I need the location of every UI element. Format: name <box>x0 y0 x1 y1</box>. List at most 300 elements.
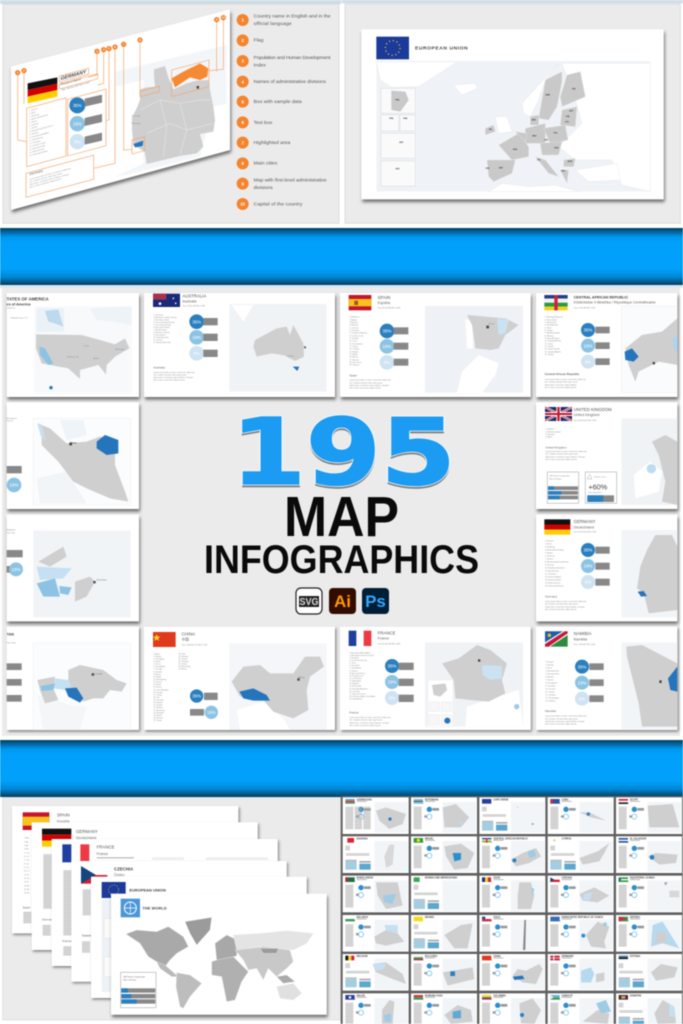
Germany map <box>132 63 215 164</box>
card: Namibia: 1. Erongo <box>545 662 553 664</box>
card: Australia: 2. Australian Capital Territory <box>153 316 177 319</box>
card: Namibia: 35% <box>578 664 586 669</box>
slide: Spain: Spain <box>23 905 31 909</box>
card: Denmark <box>7 515 139 621</box>
orange callout boxes and leaders: 1 <box>17 71 19 75</box>
icon: United Nations emblem <box>121 899 140 917</box>
card: China: 1. Anhui <box>153 652 161 655</box>
flag: Spain <box>349 295 371 310</box>
card: Germany: felis et amet consectetur adipiscing elit. <box>545 608 577 611</box>
slide: Spain: 1. And <box>24 837 29 840</box>
card: Spain: 17. Navarra <box>349 359 360 361</box>
card: France: elit. Curabitur interdum diam eget mauris <box>349 719 382 722</box>
card: Central African Republic: ullamcorper, at faucibus neque dapibus. <box>545 383 577 386</box>
row 6: ESWATINI <box>630 994 641 997</box>
card: Iran: Pop. 81 <box>7 421 13 423</box>
card: China: 3. Chongqing <box>153 658 164 660</box>
panel: lower-right slides <box>340 515 677 730</box>
map of Europe: ITA <box>537 159 541 162</box>
card: Germany: Lorem ipsum dolor sit amet, consectetur adipiscing <box>545 600 586 603</box>
map of Europe: PRT <box>396 169 400 171</box>
card: France: 18. Provence-Alpes-Côte d'Azur <box>349 695 376 698</box>
card: Germany: Deutschland <box>574 525 594 529</box>
card: Namibia: Namibia <box>545 709 556 713</box>
card: Central African Republic: 13. Ouham-Pendé <box>545 349 560 351</box>
card: United Kingdom: United Kingdom <box>574 413 600 417</box>
numbered legend: Index <box>254 62 266 68</box>
card: China: 30. Yunnan <box>178 658 188 660</box>
row 6: DJIBOUTI <box>562 995 573 997</box>
card: Central African Republic <box>536 293 677 397</box>
card: Kazakhstan: TAN <box>7 632 14 636</box>
country name: Pop. 83,019,200 HDI: 0.947 <box>61 81 91 92</box>
card: Central African Republic: 9. Nana-Mambéré <box>545 338 559 340</box>
card: Australia: 7. Norfolk Island <box>153 329 167 331</box>
slide: Spain: España <box>57 820 70 824</box>
orange callout boxes and leaders: 9 <box>216 18 218 22</box>
card: Denmark: København <box>97 580 107 582</box>
card: Namibia: elit. Curabitur interdum diam eget mauris <box>545 717 578 720</box>
card: France: 3. Bretagne <box>349 656 359 659</box>
card: Namibia: 13. Otjozondjupa <box>545 697 560 700</box>
card: China: 29. Xinjiang <box>178 656 188 658</box>
icon: SVG <box>296 588 322 614</box>
card: France: 8. Guyane <box>349 670 358 672</box>
list of administrative divisions: 7. Hessen <box>29 126 38 130</box>
flag: China <box>153 632 176 647</box>
slide: Germany: GERMANY <box>76 829 98 834</box>
card: Central African Republic: Ködörösêse tî Bêafrîka / République Centrafricaine <box>574 301 656 305</box>
card: United Kingdom: 2. Northern Ireland <box>545 430 561 433</box>
card: United States: Washington <box>115 348 125 351</box>
slanted Germany slide <box>11 9 230 210</box>
row 5 <box>343 954 682 991</box>
card: France: felis et amet consectetur adipiscing elit. <box>349 724 382 727</box>
orange callout boxes and leaders: 3 <box>96 49 98 53</box>
card: China: 8. Guizhou <box>153 671 162 673</box>
row 4: CHILE <box>493 917 501 919</box>
row 2: BRAZIL <box>425 837 434 840</box>
card: Spain: 13. La Rioja <box>349 349 360 351</box>
card: Central African Republic: 7. Mambéré-Kadéï <box>545 333 560 335</box>
row 6: BURKINA FASO <box>425 994 443 997</box>
map of Europe: DEU <box>532 136 537 138</box>
card: Australia: elit. Curabitur interdum diam eget mauris <box>153 373 186 376</box>
panel: top-left slides <box>7 293 335 509</box>
row 3: CHAD <box>493 877 500 880</box>
card: China: 13. Hubei <box>153 684 162 686</box>
card: Germany: 13. Sachsen-Anhalt <box>545 576 561 579</box>
slide: Spain <box>12 806 238 933</box>
country name <box>61 69 91 92</box>
numbered legend: Population and Human Development <box>254 55 331 61</box>
slide: Spain: 12. Ga <box>24 878 30 880</box>
world map <box>126 917 313 1008</box>
country name: GERMANY <box>61 69 87 82</box>
numbered legend: 6 <box>241 120 244 125</box>
list of administrative divisions: 5. Bayern <box>29 120 37 124</box>
slide: Czechia <box>71 861 287 982</box>
slide: Czechia: CZECHIA <box>114 866 134 871</box>
card: Spain: 3. Asturias <box>349 321 358 324</box>
card: Spain: ullamcorper, at faucibus neque dapibus. Quisque <box>349 384 389 387</box>
card: China: 9. Hainan <box>153 674 161 676</box>
row 4: BRUNEI <box>425 917 434 919</box>
row 3: BOSNIA AND HERZEGOVINA <box>425 877 458 880</box>
list of administrative divisions: 11. Brandenburg <box>29 137 43 142</box>
numbered legend: Main cities <box>254 161 278 167</box>
slide: Spain: 6. Cnt <box>24 855 29 858</box>
numbered legend: Highlighted area <box>254 140 291 146</box>
map of Europe: IRL <box>489 129 493 131</box>
row 5: DENMARK <box>562 955 574 958</box>
card: Central African Republic: felis et amet consectetur adipiscing elit. <box>545 386 577 389</box>
card: Namibia: 8. Ohangwena <box>545 683 558 685</box>
card: Australia: 9% <box>194 351 200 356</box>
card: France: 7. Guadeloupe <box>349 668 361 670</box>
row 5: CHINA <box>493 955 501 958</box>
slide: Spain: 7. Cas <box>24 860 29 862</box>
card: Spain: 7. Castilla-La Mancha <box>349 332 368 335</box>
card: Iran <box>7 402 139 509</box>
card: Germany: Pop. 83,019,200 HDI: 0.947 <box>574 532 596 534</box>
slide: Spain: SPAIN <box>57 813 70 818</box>
card: France: 15. Nouvelle-Aquitaine <box>349 687 368 690</box>
row 3: EQUATORIAL GUINEA <box>630 877 655 880</box>
map of Europe: LTU <box>565 122 569 124</box>
orange callout boxes and leaders <box>15 15 226 197</box>
card: France: 16. Occitanie <box>349 690 360 693</box>
box: GDP sector composition: GDP Sector Composition <box>123 976 145 979</box>
numbered legend: divisions <box>254 185 273 191</box>
card: Germany: 19% <box>584 564 592 569</box>
blue band one <box>0 228 683 285</box>
card: Spain: Spain <box>349 373 357 377</box>
card: Germany: 9. Sachsen <box>545 565 554 567</box>
row 5: BULGARIA <box>425 955 438 958</box>
card: France: France <box>349 710 359 714</box>
numbered legend: 8 <box>241 161 244 166</box>
card: China: 15. Inner Mongolia <box>153 689 169 691</box>
title: 195: 195 <box>231 399 456 506</box>
card: France: 6. Grand Est <box>349 664 360 667</box>
card: Australia: Australia <box>182 299 198 303</box>
card: Spain: SPAIN <box>378 295 390 300</box>
card: United States: es of America <box>7 303 31 307</box>
card: Germany: 5. Bayern <box>545 553 553 555</box>
card: Denmark: Midtjylland <box>7 529 15 532</box>
card: China: 21. Qinghai <box>153 705 163 707</box>
map of Europe <box>376 61 650 192</box>
card: Spain: 6. Cantabria <box>349 329 360 332</box>
flag: Central African Republic <box>544 295 568 310</box>
card: Central African Republic: Lorem ipsum dolor sit amet, consectetur adipiscing <box>545 378 586 381</box>
orange callout boxes and leaders: 6 <box>114 45 116 49</box>
slide: France <box>52 839 278 966</box>
box: +60% statistic: +60% <box>588 483 608 492</box>
card: Germany: 2. Berlin <box>545 544 552 546</box>
box: +60% statistic <box>585 472 617 503</box>
card: Central African Republic: 6. Lobaye <box>545 330 553 332</box>
card: Australia: 8. Northern Territory <box>153 331 170 334</box>
card: United States: Lincoln <box>83 346 89 348</box>
icon: Adobe Illustrator <box>329 588 356 614</box>
card: China: 14. Hunan <box>153 687 162 689</box>
map of Europe: POL <box>554 132 558 134</box>
card: Namibia: 10. Omusati <box>545 688 556 691</box>
row 2 <box>343 836 682 873</box>
card: United States: Capital etc <box>7 307 15 310</box>
row 3: BANGLADESH <box>357 877 373 880</box>
slide: Germany: Deutschland <box>76 836 96 840</box>
card: United Kingdom: 3. Scotland <box>545 433 554 436</box>
row 2: CENTRAL AFRICAN REPUBLIC <box>493 837 528 840</box>
card: China: 23. Shandong <box>153 710 165 712</box>
card: Germany: 4. Baden-Württemberg <box>545 549 563 552</box>
card: Germany: 14. Rheinland-Pfalz <box>545 580 561 582</box>
numbered legend: 4 <box>241 79 244 84</box>
blue band two <box>0 740 683 797</box>
card: China: 28. Tibet <box>178 652 186 655</box>
card: Spain: España <box>378 301 391 305</box>
list of administrative divisions: 12. Thüringen <box>29 140 41 145</box>
card: Kazakhstan <box>7 627 139 730</box>
card: France: 9. Hauts-de-France <box>349 672 365 675</box>
slide: Spain: 13. Ri <box>24 882 29 884</box>
orange callout boxes and leaders: 4 <box>103 48 105 52</box>
slide: The World <box>111 894 327 1015</box>
card: United Kingdom: 4. Wales <box>545 437 552 439</box>
card: China: 35% <box>192 694 201 699</box>
card: Australia: Pop. 25,203,198 HDI: 0.939 <box>182 305 205 307</box>
card: China: 19% <box>207 710 216 715</box>
sample data circles: 35% <box>73 103 82 108</box>
map of Europe: DNK <box>532 120 536 122</box>
row 4: BELARUS <box>357 916 368 919</box>
card: Germany: elit. Curabitur interdum diam eget mauris <box>545 603 578 606</box>
card: Australia: 10. South Australia <box>153 336 170 339</box>
map of Europe: HUN <box>554 148 559 150</box>
card: Australia: 19% <box>192 335 201 340</box>
country name: Deutschland <box>61 77 81 86</box>
card: France: 10. Île-de-France <box>349 674 363 677</box>
orange callout boxes and leaders: 2 <box>23 69 25 73</box>
map of Europe: GRC <box>561 170 566 172</box>
card: Kazakhstan: Pop. 18.3m <box>7 642 16 644</box>
row 4: DEMOCRATIC REPUBLIC OF CONGO <box>562 916 603 919</box>
card: China: 26. Sichuan <box>153 717 163 719</box>
flag: United Kingdom <box>545 407 572 421</box>
card: China: 7. Guangxi <box>153 669 163 671</box>
card: Iran: Mazandaran <box>7 418 17 420</box>
card: France <box>340 627 531 730</box>
card: Namibia: felis et amet consectetur adipiscing elit. <box>545 723 577 726</box>
text box: Lorem ipsum dolor sit amet, consectetur adipiscing <box>29 167 70 181</box>
slide: Spain: 10. Ce <box>24 871 29 873</box>
card: China: Pop. 1,439,323,776 HDI: 0.758 <box>182 644 207 646</box>
card: France: 11. La Réunion <box>349 678 362 680</box>
slide: Czechia: Czechia <box>82 934 94 938</box>
map of Europe: EST <box>569 110 574 112</box>
row 3: CZECHIA <box>562 877 572 880</box>
card: Germany: 11. Brandenburg <box>545 571 558 573</box>
numbered legend: 9 <box>241 181 244 186</box>
card: China: 4. Fujian <box>153 661 160 663</box>
card: Germany: 12. Thüringen <box>545 574 556 576</box>
panel: stacked slides <box>3 797 342 1020</box>
card: China: 6. Guangdong <box>153 666 165 668</box>
card: United Kingdom: ullamcorper, at faucibus neque dapibus. Quisque <box>545 455 585 458</box>
list of administrative divisions: 16. Schleswig-Holstein <box>29 149 48 157</box>
row 5: BELGIUM <box>357 956 367 958</box>
card: Spain: 5. Canarias <box>349 327 359 329</box>
card: United Kingdom: Pop. 66,435,550 HDI: 0.932 <box>574 420 596 422</box>
card: France: 35% <box>388 664 396 669</box>
card: Spain: Pop. 46,733,038 HDI: 0.893 <box>378 307 400 309</box>
card: China: 31. Zhejiang <box>178 661 188 663</box>
card: Germany: 6. Saarland <box>545 556 554 558</box>
slide: Spain: 9. Cat <box>24 866 29 869</box>
orange callout boxes and leaders: 7 <box>123 42 125 46</box>
card: France: 14. Normandie <box>349 686 361 688</box>
title: 195: 195 <box>231 399 456 506</box>
card: Germany: 10. Nordrhein-Westfalen <box>545 567 565 570</box>
card: Spain: 12. Galicia <box>349 346 359 348</box>
card: Spain: elit. Curabitur interdum diam eget mauris <box>349 381 382 384</box>
card: Namibia: 6. Khomas <box>545 677 554 679</box>
card: Denmark: Pop. 5.8m <box>7 532 15 534</box>
numbered legend: Country name in English and in the <box>254 14 331 20</box>
card: Germany: 35% <box>584 548 592 553</box>
card: United States: Atlanta <box>93 357 100 360</box>
map of Europe: BGR <box>568 161 573 163</box>
card: United Kingdom: 1. England <box>545 429 554 431</box>
map of Europe: FIN <box>572 88 576 90</box>
card: China: 24. Shanghai <box>153 712 165 714</box>
flag: Namibia <box>545 631 568 647</box>
card: Australia: 4. Cocos (Keeling) Islands <box>153 322 175 324</box>
row 4: ERITREA <box>630 916 641 919</box>
slide: France: France <box>97 852 108 856</box>
list of administrative divisions: 4. Baden-Württemberg <box>29 113 48 121</box>
card: China: 20. Ningxia <box>153 702 163 704</box>
card: Namibia: 3. Karas <box>545 668 552 670</box>
row 1: BOTSWANA <box>425 798 439 801</box>
box: GDP sector composition: Rate in Europe <box>123 978 136 981</box>
row 2: BAHRAIN <box>357 837 368 840</box>
numbered legend: 10 <box>240 202 246 207</box>
sample data circles: 19% <box>73 121 82 126</box>
card: Germany: GERMANY <box>574 519 596 524</box>
box: GDP sector composition: Rate in Europe <box>549 477 562 480</box>
card: China <box>144 627 335 730</box>
numbered legend <box>237 14 331 210</box>
slide: France: FRANCE <box>97 845 115 850</box>
card: China: CHINA <box>182 632 195 637</box>
row 1 <box>343 797 682 834</box>
card: Central African Republic: 3. Haute-Kotto <box>545 321 556 324</box>
card: United States <box>7 293 139 397</box>
map of Europe: PRT <box>486 168 490 170</box>
card: Australia <box>144 293 335 397</box>
card: China: 19. Liaoning <box>153 700 163 702</box>
panel: anatomy of a map slide <box>0 0 341 223</box>
row 2: EL SALVADOR <box>630 837 647 840</box>
text box: Germany <box>29 169 43 176</box>
row 6: COLOMBIA <box>493 994 506 997</box>
list of administrative divisions: 8. Mecklenburg-Vorpommern <box>29 125 53 133</box>
card: Australia: 9. Queensland <box>153 334 165 336</box>
card: Central African Republic: 11. Ouaka <box>545 343 554 345</box>
card: United Kingdom: UNITED KINGDOM <box>574 407 612 412</box>
card: China: 2. Beijing <box>153 656 161 658</box>
card: Australia: felis et amet consectetur adipiscing elit. <box>153 378 186 381</box>
numbered legend: 2 <box>241 38 244 43</box>
row 2: CYPRUS <box>562 838 572 840</box>
card: Central African Republic: 4. Haut-Mbomou <box>545 324 558 327</box>
sample data circles <box>69 95 102 149</box>
card: Germany: Germany <box>545 594 558 598</box>
slide: European Union <box>91 877 307 998</box>
row 1: AZERBAIJAN <box>357 798 372 801</box>
card: China: 16. Jiangsu <box>153 692 163 694</box>
panel: grid of 30 mini slides <box>341 796 683 1024</box>
card: Australia: 3. Christmas Island <box>153 319 169 322</box>
card: China: 32. Taiwan <box>178 664 187 666</box>
sample data circles: 9% <box>74 139 81 144</box>
card: Central African Republic: 1. Bamingui-Bangoran <box>545 317 563 319</box>
slide: France: France <box>62 939 72 943</box>
card: Spain: 1. Andalucía <box>349 316 360 319</box>
numbered legend: Box with sample data <box>254 99 302 105</box>
card: United Kingdom: United Kingdom <box>545 445 567 449</box>
title: INFOGRAPHICS: INFOGRAPHICS <box>204 538 479 582</box>
slide title: EUROPEAN UNION <box>415 46 468 52</box>
text box: ullamcorper, at faucibus neque dapibus. Quisque <box>29 173 69 186</box>
list of administrative divisions: 3. Hamburg <box>29 114 39 118</box>
slide: Spain: 8. Cyl <box>24 863 29 865</box>
numbered legend: Capital of the country <box>254 201 303 207</box>
list of administrative divisions: 1. Bremen <box>29 108 38 112</box>
card: Spain: Lorem ipsum dolor sit amet, consectetur adipiscing <box>349 379 390 382</box>
card: Spain: 35% <box>383 329 391 334</box>
card: Australia: AUSTRALIA <box>182 293 206 298</box>
list of administrative divisions: 9. Sachsen <box>29 132 38 136</box>
card: Australia: Lorem ipsum dolor sit amet, consectetur adipiscing <box>153 371 194 374</box>
card: Germany: 16. Schleswig-Holstein <box>545 585 563 588</box>
slide: European Union: EUROPEAN UNION <box>129 887 166 892</box>
slide: Spain: 15. Me <box>24 889 30 891</box>
card: France: ullamcorper, at faucibus neque dapibus. Quisque <box>349 721 389 724</box>
card: Spain: 10. Ceuta <box>349 340 358 343</box>
numbered legend: Text box <box>254 120 273 126</box>
slide: Spain: 3. Ast <box>24 844 29 847</box>
map of Europe: CZE <box>544 140 549 142</box>
card: France: 12. Martinique <box>349 680 361 683</box>
card: Australia: 5. Jervis Bay Territory <box>153 324 171 327</box>
map of Europe: LVA <box>566 115 570 118</box>
row 5: ESTONIA <box>630 955 641 958</box>
card: Spain: 15. Melilla <box>349 354 359 356</box>
title: 195: 195 <box>231 401 456 508</box>
map of Europe: FRA <box>513 148 518 151</box>
numbered legend: 7 <box>241 140 244 145</box>
panel: European Union slide <box>342 0 683 223</box>
card: Germany: ullamcorper, at faucibus neque dapibus. Quisque <box>545 605 585 608</box>
list of administrative divisions: 6. Saarland <box>29 123 39 127</box>
card: China: 中国 <box>182 636 189 641</box>
card: Namibia <box>536 627 677 730</box>
